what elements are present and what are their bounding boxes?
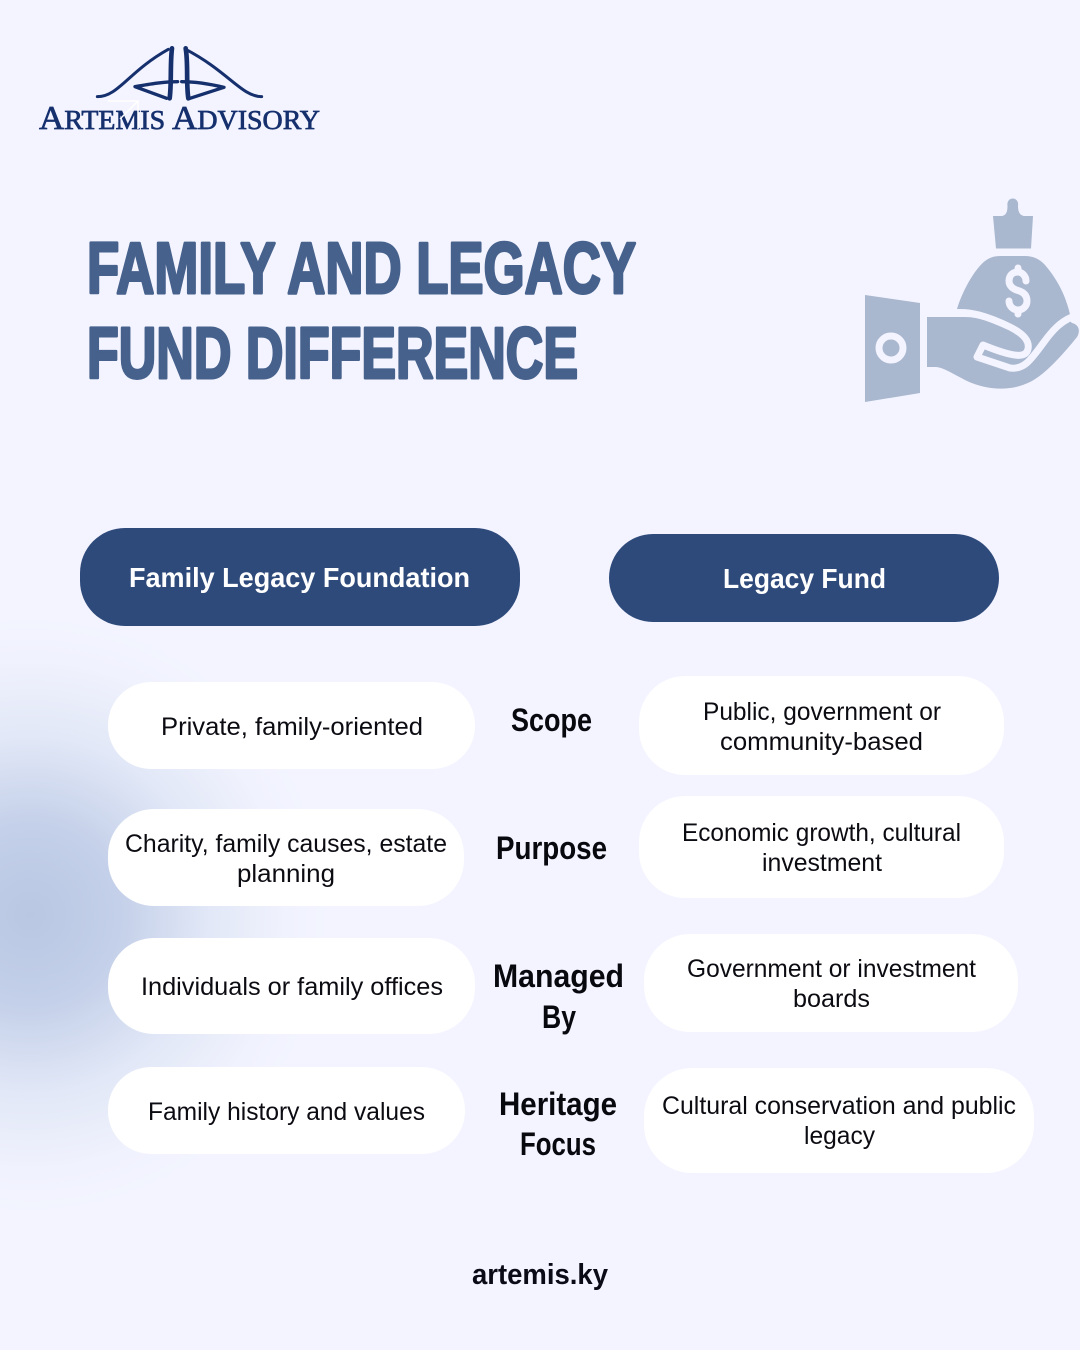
fund heritage: legacy xyxy=(804,1122,875,1150)
foundation purpose: planning xyxy=(237,860,335,888)
label: Heritage Focus xyxy=(499,1086,617,1162)
bag body xyxy=(957,256,1071,360)
background glow xyxy=(0,600,340,1230)
fund heritage xyxy=(644,1068,1034,1173)
cuff button xyxy=(879,336,903,360)
fund scope: community-based xyxy=(720,728,923,756)
title xyxy=(87,229,636,394)
fund purpose: Economic growth, cultural xyxy=(682,819,961,847)
row: Purpose xyxy=(108,796,1004,906)
logo highlight arrow xyxy=(108,101,138,129)
label: Scope: Scope xyxy=(511,702,592,738)
row: Heritage Focus xyxy=(108,1067,1034,1173)
foundation purpose xyxy=(108,809,464,906)
fund managers: Government or investment xyxy=(687,955,976,983)
label: Heritage Focus: Heritage xyxy=(499,1086,617,1122)
header: Legacy Fund xyxy=(609,534,999,622)
finger outline xyxy=(958,312,1072,368)
icon: hand holding money bag xyxy=(865,198,1079,402)
fund scope xyxy=(639,676,1004,775)
fund heritage: Cultural conservation and public xyxy=(662,1092,1016,1120)
logo mark xyxy=(97,48,262,98)
foundation managers xyxy=(108,938,475,1034)
fund purpose xyxy=(639,796,1004,898)
logo wordmark: ARTEMIS ADVISORY xyxy=(39,100,320,137)
title line 2: FUND DIFFERENCE xyxy=(87,314,578,394)
sleeve cuff xyxy=(865,295,920,402)
title line 1: FAMILY AND LEGACY xyxy=(87,229,636,309)
row: Scope xyxy=(108,676,1004,775)
bag neck xyxy=(993,198,1033,248)
dollar sign xyxy=(1009,268,1027,314)
foundation purpose: Charity, family causes, estate xyxy=(125,830,447,858)
header: Legacy Fund: Legacy Fund xyxy=(723,563,886,594)
label: Managed By xyxy=(493,958,624,1035)
foundation scope: Private, family-oriented xyxy=(161,713,423,741)
fund managers: boards xyxy=(793,985,870,1013)
label: Managed By: Managed xyxy=(493,958,624,994)
footer website: artemis.ky xyxy=(472,1259,608,1291)
hand xyxy=(927,317,1079,389)
row: Managed By xyxy=(108,934,1018,1035)
foundation heritage: Family history and values xyxy=(148,1098,425,1126)
foundation scope xyxy=(108,682,475,769)
fund managers xyxy=(644,934,1018,1032)
fund purpose: investment xyxy=(762,849,882,877)
fund scope: Public, government or xyxy=(703,698,941,726)
foundation managers: Individuals or family offices xyxy=(141,973,443,1001)
label: Managed By: By xyxy=(542,999,576,1035)
logo: Artemis Advisory xyxy=(39,48,320,137)
label: Heritage Focus: Focus xyxy=(520,1126,596,1162)
label: Purpose: Purpose xyxy=(496,830,607,866)
foundation heritage xyxy=(108,1067,465,1154)
header: Family Legacy Foundation xyxy=(80,528,520,626)
header: Family Legacy Foundation: Family Legacy Foundation xyxy=(129,562,470,593)
